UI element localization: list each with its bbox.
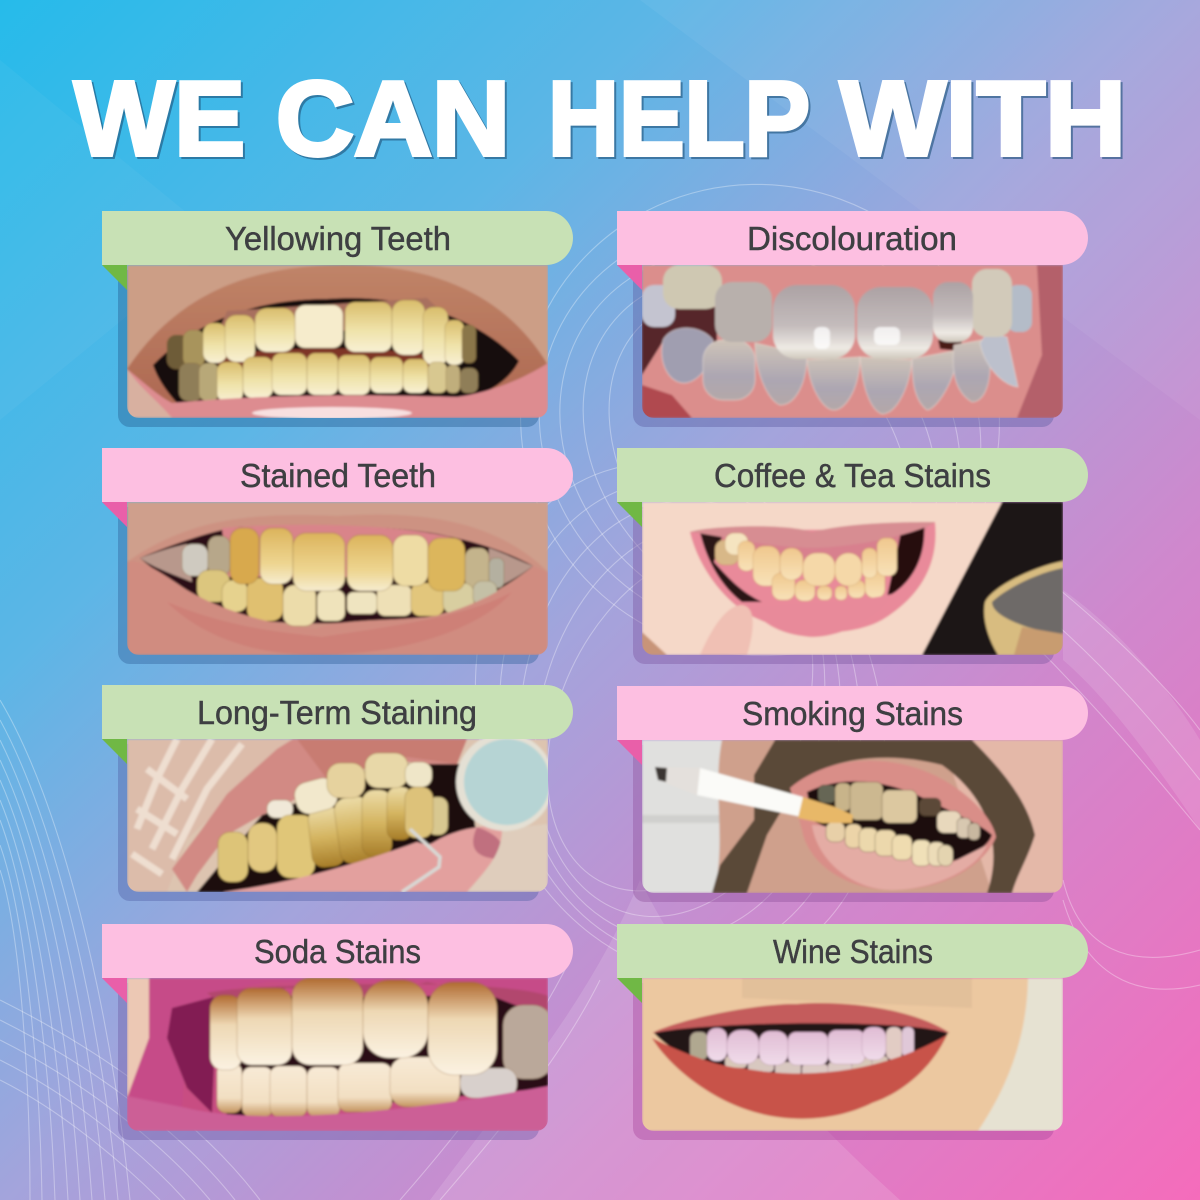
photo: yellowing teeth (127, 265, 548, 419)
photo: smoking stains (642, 740, 1063, 893)
glass (984, 561, 1063, 655)
panel: Long-Term Staining (102, 685, 573, 901)
panel: Coffee & Tea Stains (617, 448, 1088, 664)
fold corner (102, 739, 127, 764)
panel: Stained Teeth (102, 448, 573, 664)
fold corner (102, 265, 127, 290)
panel: Discolouration (617, 211, 1088, 427)
panel: Soda Stains (102, 924, 573, 1140)
banner (617, 686, 1088, 740)
banner (102, 924, 573, 978)
banner (102, 685, 573, 739)
dental mirror (456, 733, 554, 831)
cigarette (655, 767, 853, 823)
title: HELP (548, 60, 810, 178)
label: Smoking Stains (742, 695, 963, 732)
label: Wine Stains (773, 933, 933, 970)
fold corner (102, 978, 127, 1003)
banner (102, 448, 573, 502)
title: CAN (276, 60, 510, 178)
title: WITH (840, 60, 1126, 178)
fold corner (617, 502, 642, 527)
title: WE (74, 60, 245, 178)
label: Discolouration (747, 220, 957, 257)
fold corner (617, 978, 642, 1003)
panel: Smoking Stains (617, 686, 1088, 902)
panel: Yellowing Teeth (102, 211, 573, 427)
photo: soda stains (127, 978, 553, 1131)
panel: Wine Stains (617, 924, 1088, 1140)
banner (617, 448, 1088, 502)
banner (617, 211, 1088, 265)
label: Soda Stains (254, 933, 421, 970)
title (74, 60, 1126, 178)
photo: long-term staining (127, 733, 554, 892)
photo: coffee and tea stains (642, 502, 1063, 655)
photo: wine stains (642, 978, 1063, 1131)
label: Coffee & Tea Stains (714, 457, 991, 494)
fold corner (617, 265, 642, 290)
label: Stained Teeth (240, 457, 436, 494)
label: Yellowing Teeth (225, 220, 451, 257)
banner (102, 211, 573, 265)
fold corner (617, 740, 642, 765)
label: Long-Term Staining (197, 694, 477, 731)
photo: stained teeth (127, 502, 548, 655)
photo: discolouration (642, 265, 1063, 418)
fold corner (102, 502, 127, 527)
banner (617, 924, 1088, 978)
